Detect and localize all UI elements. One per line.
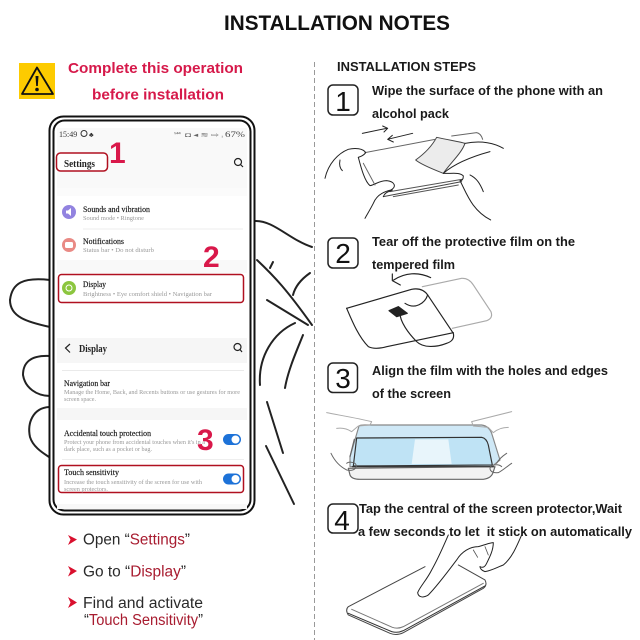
step 4 [328,501,633,634]
warning heading: Complete this operation [68,60,243,77]
menu item: sounds and vibration [62,204,151,222]
setting: navigation bar: Manage the Home, Back, and Recents buttons or use gestures for more [64,389,240,396]
instruction: go to display: Go to “Display” [83,564,186,580]
setting: touch sensitivity with red highlight: screen protectors. [64,486,108,493]
step number 2: 2 [203,241,220,274]
setting: navigation bar [64,378,240,403]
step 4 text [358,501,633,539]
menu item: notifications: Notifications [83,236,124,246]
setting: navigation bar: screen space. [64,396,96,403]
setting: touch sensitivity with red highlight: Touch sensitivity [64,467,120,477]
step number 1: 1 [109,137,126,170]
step 3 [327,363,608,479]
step 1 text [372,83,603,121]
instruction: activate touch sensitivity: “Touch Sensitivity” [84,612,203,629]
menu item: sounds and vibration: Sounds and vibration [83,204,151,214]
settings heading with red highlight [56,153,108,171]
step 2 [328,234,575,348]
instructions list [68,532,203,629]
icon: warning sign [19,63,55,99]
panel: phone with settings screens [50,116,254,514]
display screen header: Display [79,344,107,355]
step 2 text [372,234,575,272]
steps heading: INSTALLATION STEPS [337,59,476,74]
status bar [59,130,245,139]
setting: accidental touch protection [64,428,241,453]
step 4 illustration: finger tapping the phone [347,535,522,634]
setting: navigation bar: Navigation bar [64,378,110,388]
step 1 number badge [328,85,358,117]
step 3 number badge: 3 [335,363,351,394]
menu item: display with red highlight [58,274,244,302]
step 3 text: Align the film with the holes and edges [372,363,608,378]
step 3 illustration: aligning the film [327,412,512,479]
setting: touch sensitivity with red highlight: Increase the touch sensitivity of the screen for use with [64,479,203,486]
setting: accidental touch protection: Accidental touch protection [64,428,152,438]
instruction: open settings: Open “Settings” [83,532,190,548]
step 2 illustration: peeling the film [347,274,492,348]
step 3 text: of the screen [372,386,451,401]
menu item: display with red highlight: Display [83,279,107,289]
step 4 number badge: 4 [334,505,350,536]
step 4 text: Tap the central of the screen protector,Wait [359,501,623,516]
step 1 number badge: 1 [335,86,351,117]
status bar: ℠ ◘ ◂ ≋ ⇨ ᵢ [173,131,224,139]
warning heading: before installation [92,86,224,104]
setting: accidental touch protection: dark place, such as a pocket or bag. [64,446,152,453]
instruction: activate touch sensitivity: Find and activate [83,595,203,612]
settings heading with red highlight: Settings [64,159,95,170]
status bar: ♣ [89,131,94,139]
step 2 number badge [328,238,358,269]
step 1 [325,83,603,220]
step 2 text: Tear off the protective film on the [372,234,575,249]
icon: search [234,158,243,167]
step 4 text: a few seconds to let it stick on automatically [358,524,633,539]
setting: accidental touch protection: Protect your phone from accidental touches when it's in a [64,439,205,446]
display screen header [66,344,242,355]
step 1 illustration: wiping the phone [325,126,503,220]
step 1 text: alcohol pack [372,106,450,121]
warning heading [68,60,243,104]
step 4 number badge [328,504,358,536]
step number 3: 3 [197,424,214,457]
menu item: notifications [62,236,154,254]
title: INSTALLATION NOTES [224,12,450,35]
status bar: 15:49 [59,130,77,139]
step 3 text [372,363,608,401]
setting: touch sensitivity with red highlight [58,466,244,493]
status bar: 67% [225,130,245,139]
menu item: notifications: Status bar • Do not disturb [83,247,154,254]
hand sketch behind the phone [10,221,312,504]
step 2 number badge: 2 [335,238,351,269]
step 3 number badge [328,363,358,394]
step 1 text: Wipe the surface of the phone with an [372,83,603,98]
instruction: activate touch sensitivity [68,595,203,629]
menu item: sounds and vibration: Sound mode • Ringtone [83,215,144,222]
step 2 text: tempered film [372,257,455,272]
menu item: display with red highlight: Brightness • Eye comfort shield • Navigation bar [83,291,213,298]
